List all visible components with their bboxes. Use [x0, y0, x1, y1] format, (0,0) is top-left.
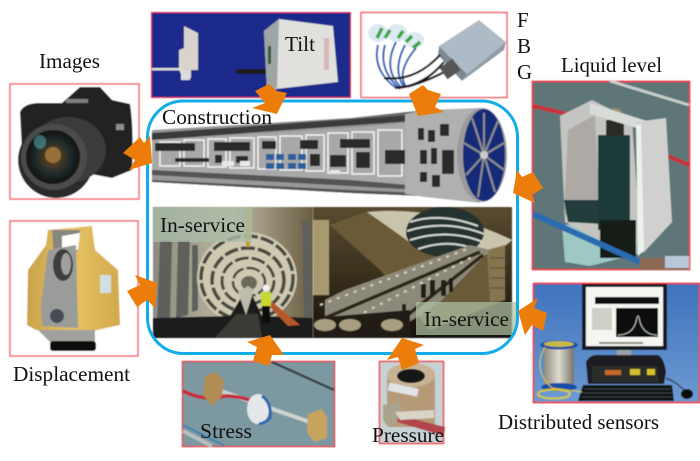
arrow: images to tunnel — [123, 136, 152, 170]
arrow: tilt to tunnel — [252, 84, 287, 114]
rounded blue outline — [148, 101, 518, 354]
heading: F B G: F — [517, 8, 529, 32]
panel: camera photo — [10, 84, 139, 199]
heading: images: Images — [39, 49, 100, 73]
panel: liquid level sensor photo — [532, 81, 690, 270]
image: underground station escalators — [313, 207, 512, 338]
heading: distributed sensors: Distributed sensors — [498, 410, 659, 434]
panel: pressure cell photo — [380, 362, 445, 444]
arrow: displacement to tunnel — [127, 275, 157, 308]
panel: total station photo — [10, 221, 138, 356]
label background: in-service right — [416, 302, 516, 335]
panel: stress gauge photo — [182, 362, 334, 446]
panel: FBG interrogator photo — [361, 12, 507, 98]
label background: in-service left — [153, 207, 252, 242]
heading: F B G — [517, 8, 532, 84]
image: in-service tunnel with worker — [153, 207, 313, 338]
panel: tunnel lifecycle frame — [148, 101, 518, 354]
heading: F B G: B — [517, 34, 531, 58]
arrow: FBG to tunnel — [409, 85, 444, 116]
heading: liquid level: Liquid level — [561, 53, 662, 77]
arrow: liquid level to tunnel — [513, 170, 543, 203]
heading: stress: Stress — [200, 419, 252, 443]
image: tunnel boring machine (construction) — [152, 103, 512, 206]
heading: in-service left: In-service — [160, 213, 245, 237]
arrow: distributed sensors to tunnel — [518, 298, 547, 335]
heading: in-service right: In-service — [424, 307, 509, 331]
heading: pressure: Pressure — [372, 423, 444, 447]
heading: tilt: Tilt — [285, 32, 315, 56]
arrow: pressure to tunnel — [387, 338, 424, 370]
heading: displacement: Displacement — [13, 362, 130, 386]
arrow: stress to tunnel — [247, 335, 284, 366]
panel: tilt sensor photo — [152, 12, 350, 98]
heading: F B G: G — [517, 60, 532, 84]
heading: construction: Construction — [162, 105, 273, 129]
panel: distributed sensors system photo — [534, 284, 700, 402]
